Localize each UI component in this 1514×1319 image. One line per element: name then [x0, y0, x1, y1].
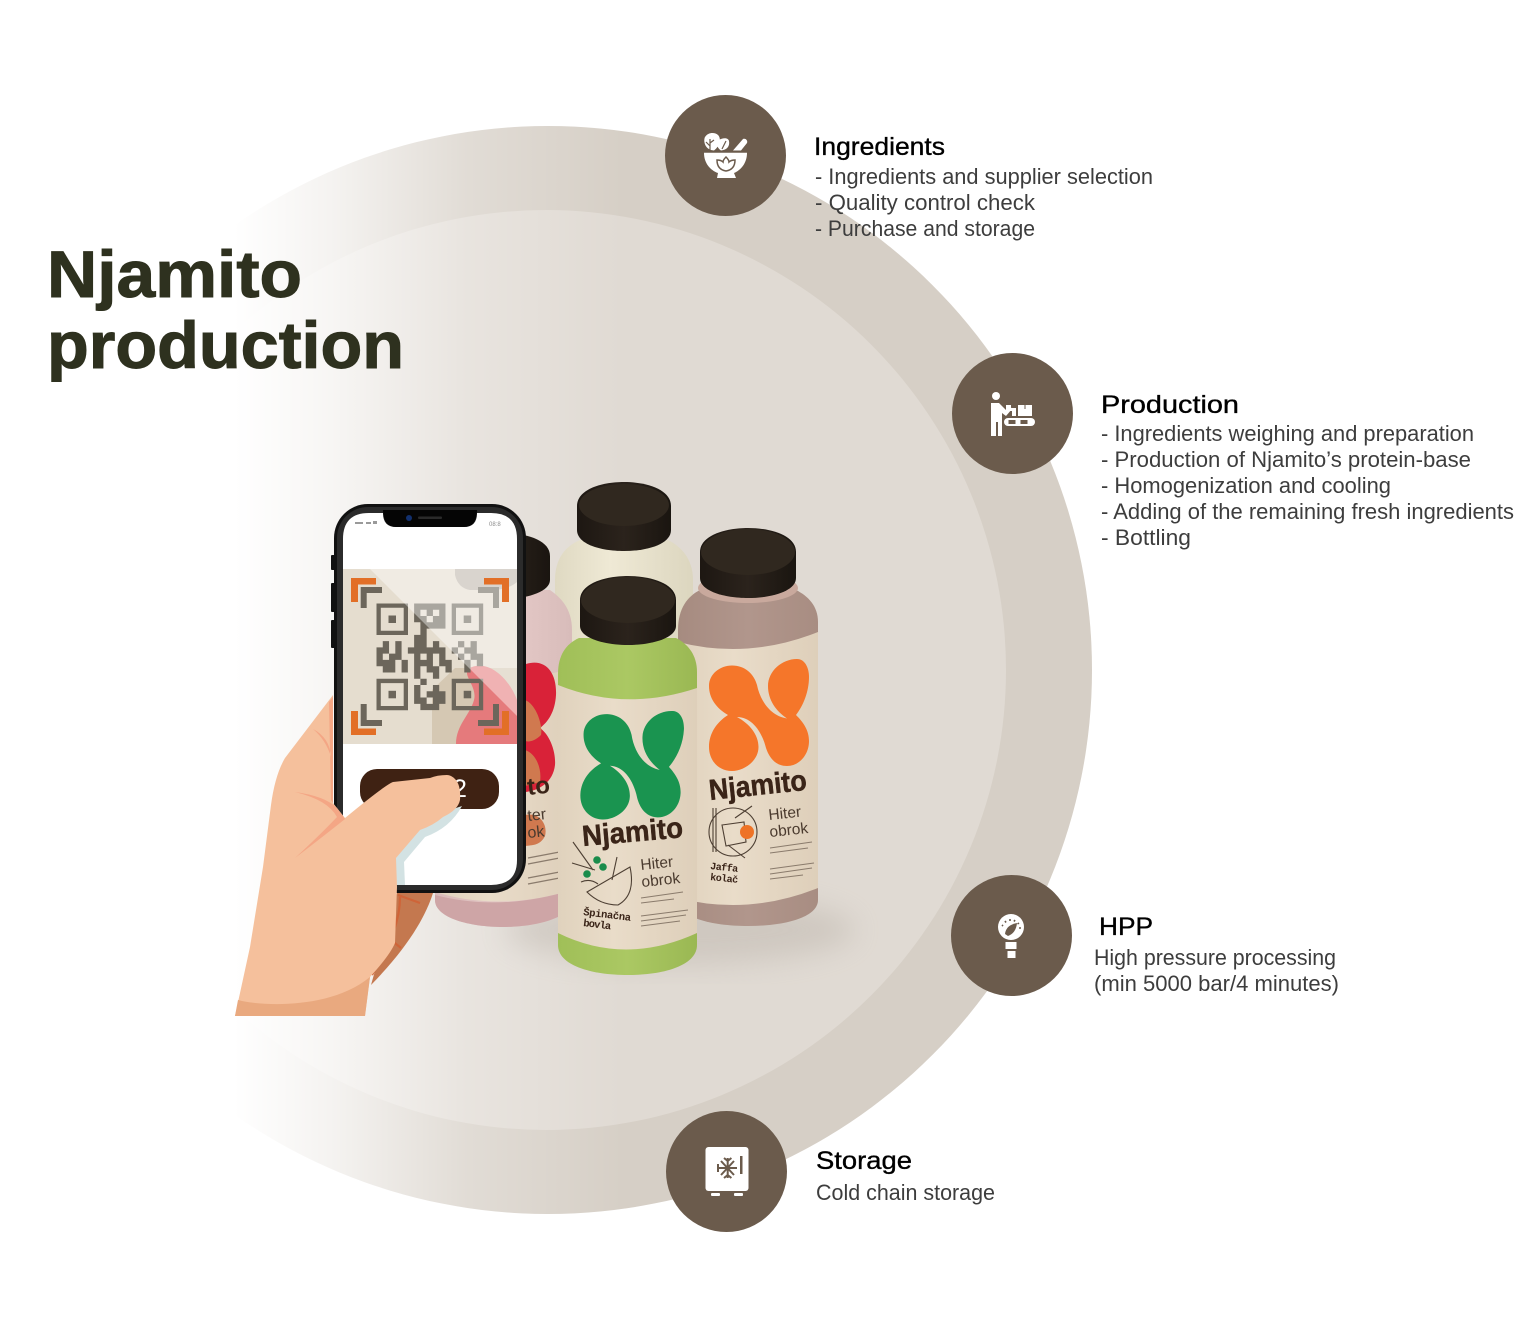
bottle: brown right: Hiter — [768, 804, 802, 824]
palm and thumb — [235, 695, 460, 1016]
text: production list: - Bottling — [1101, 525, 1191, 550]
wordmark: Njamito on front bottle: Njamito — [581, 812, 684, 853]
thumb shadow — [395, 806, 462, 885]
fingers behind the phone — [371, 893, 433, 985]
text: ingredients list: - Ingredients and supplier selection — [815, 164, 1153, 189]
wrist shading — [235, 977, 370, 1016]
title — [47, 237, 404, 382]
bottle: cream back — [555, 482, 693, 760]
text: HPP description: (min 5000 bar/4 minutes) — [1094, 971, 1339, 996]
bottle shadow — [505, 896, 855, 964]
text: production list: - Homogenization and cooling — [1101, 473, 1391, 498]
text: ingredients list: - Purchase and storage — [815, 216, 1035, 241]
bottle: pink left: ter — [527, 806, 548, 825]
bottle: brown right: obrok — [769, 820, 809, 841]
logo: orange N — [709, 659, 809, 771]
finger creases — [372, 895, 420, 975]
label illustration: bowl — [572, 842, 632, 905]
step: HPP — [951, 875, 1339, 996]
phone screen: 08:8 — [489, 522, 501, 528]
heading: HPP: HPP — [1099, 913, 1153, 941]
text: production list: - Adding of the remaining fresh ingredients — [1101, 499, 1514, 524]
bottle: brown right — [678, 528, 818, 926]
bottle: pink left — [435, 533, 572, 927]
title: production — [47, 308, 404, 382]
phone screen — [343, 510, 517, 885]
logo: green N — [579, 706, 685, 823]
bottle: green front: bovla — [583, 918, 612, 933]
QR code — [361, 587, 499, 726]
step: ingredients — [665, 95, 1153, 241]
icon: worker at conveyor — [952, 353, 1073, 474]
bottle: green front: Hiter — [640, 854, 674, 874]
heading: Storage: Storage — [816, 1147, 912, 1175]
bottle: green front: obrok — [641, 870, 681, 891]
scan button: 2 — [453, 775, 467, 803]
text: HPP description — [1094, 945, 1339, 996]
hand holding phone — [235, 695, 460, 1016]
step: storage — [666, 1111, 995, 1232]
icon: mortar and leaves — [665, 95, 786, 216]
text: production list: - Production of Njamito’s protein-base — [1101, 447, 1471, 472]
text: ingredients list: - Quality control check — [815, 190, 1036, 215]
label illustration: plate — [709, 806, 757, 858]
text: production list: - Ingredients weighing and preparation — [1101, 421, 1474, 446]
heading: Ingredients: Ingredients — [814, 133, 945, 161]
bottle: green front: Špinačna — [583, 905, 633, 925]
text: production list — [1101, 421, 1514, 550]
bottle: green front — [558, 576, 697, 975]
phone — [331, 504, 526, 893]
title: Njamito — [47, 237, 302, 311]
background: outer and inner circles — [0, 100, 1092, 1240]
bottle: pink left: ok — [527, 823, 546, 842]
heading: Production: Production — [1101, 391, 1239, 419]
scan button — [360, 769, 499, 809]
knuckle creases — [295, 697, 345, 858]
step: production — [952, 353, 1514, 550]
QR scan panel — [343, 569, 517, 744]
bottle: brown right: Jaffa — [710, 861, 739, 876]
orange corner brackets — [351, 578, 509, 735]
bottles group — [435, 482, 855, 975]
wordmark: Njamito on right bottle: Njamito — [707, 765, 808, 807]
icon: cold storage fridge — [666, 1111, 787, 1232]
text: HPP description: High pressure processing — [1094, 945, 1336, 970]
bottle: brown right: kolač — [710, 872, 739, 887]
inner gray brackets — [361, 587, 499, 726]
bottle: pink left: to — [526, 772, 551, 801]
phone body — [331, 504, 526, 893]
text: ingredients list — [815, 164, 1153, 241]
text: storage description: Cold chain storage — [816, 1180, 995, 1205]
icon: pressure gauge — [951, 875, 1072, 996]
